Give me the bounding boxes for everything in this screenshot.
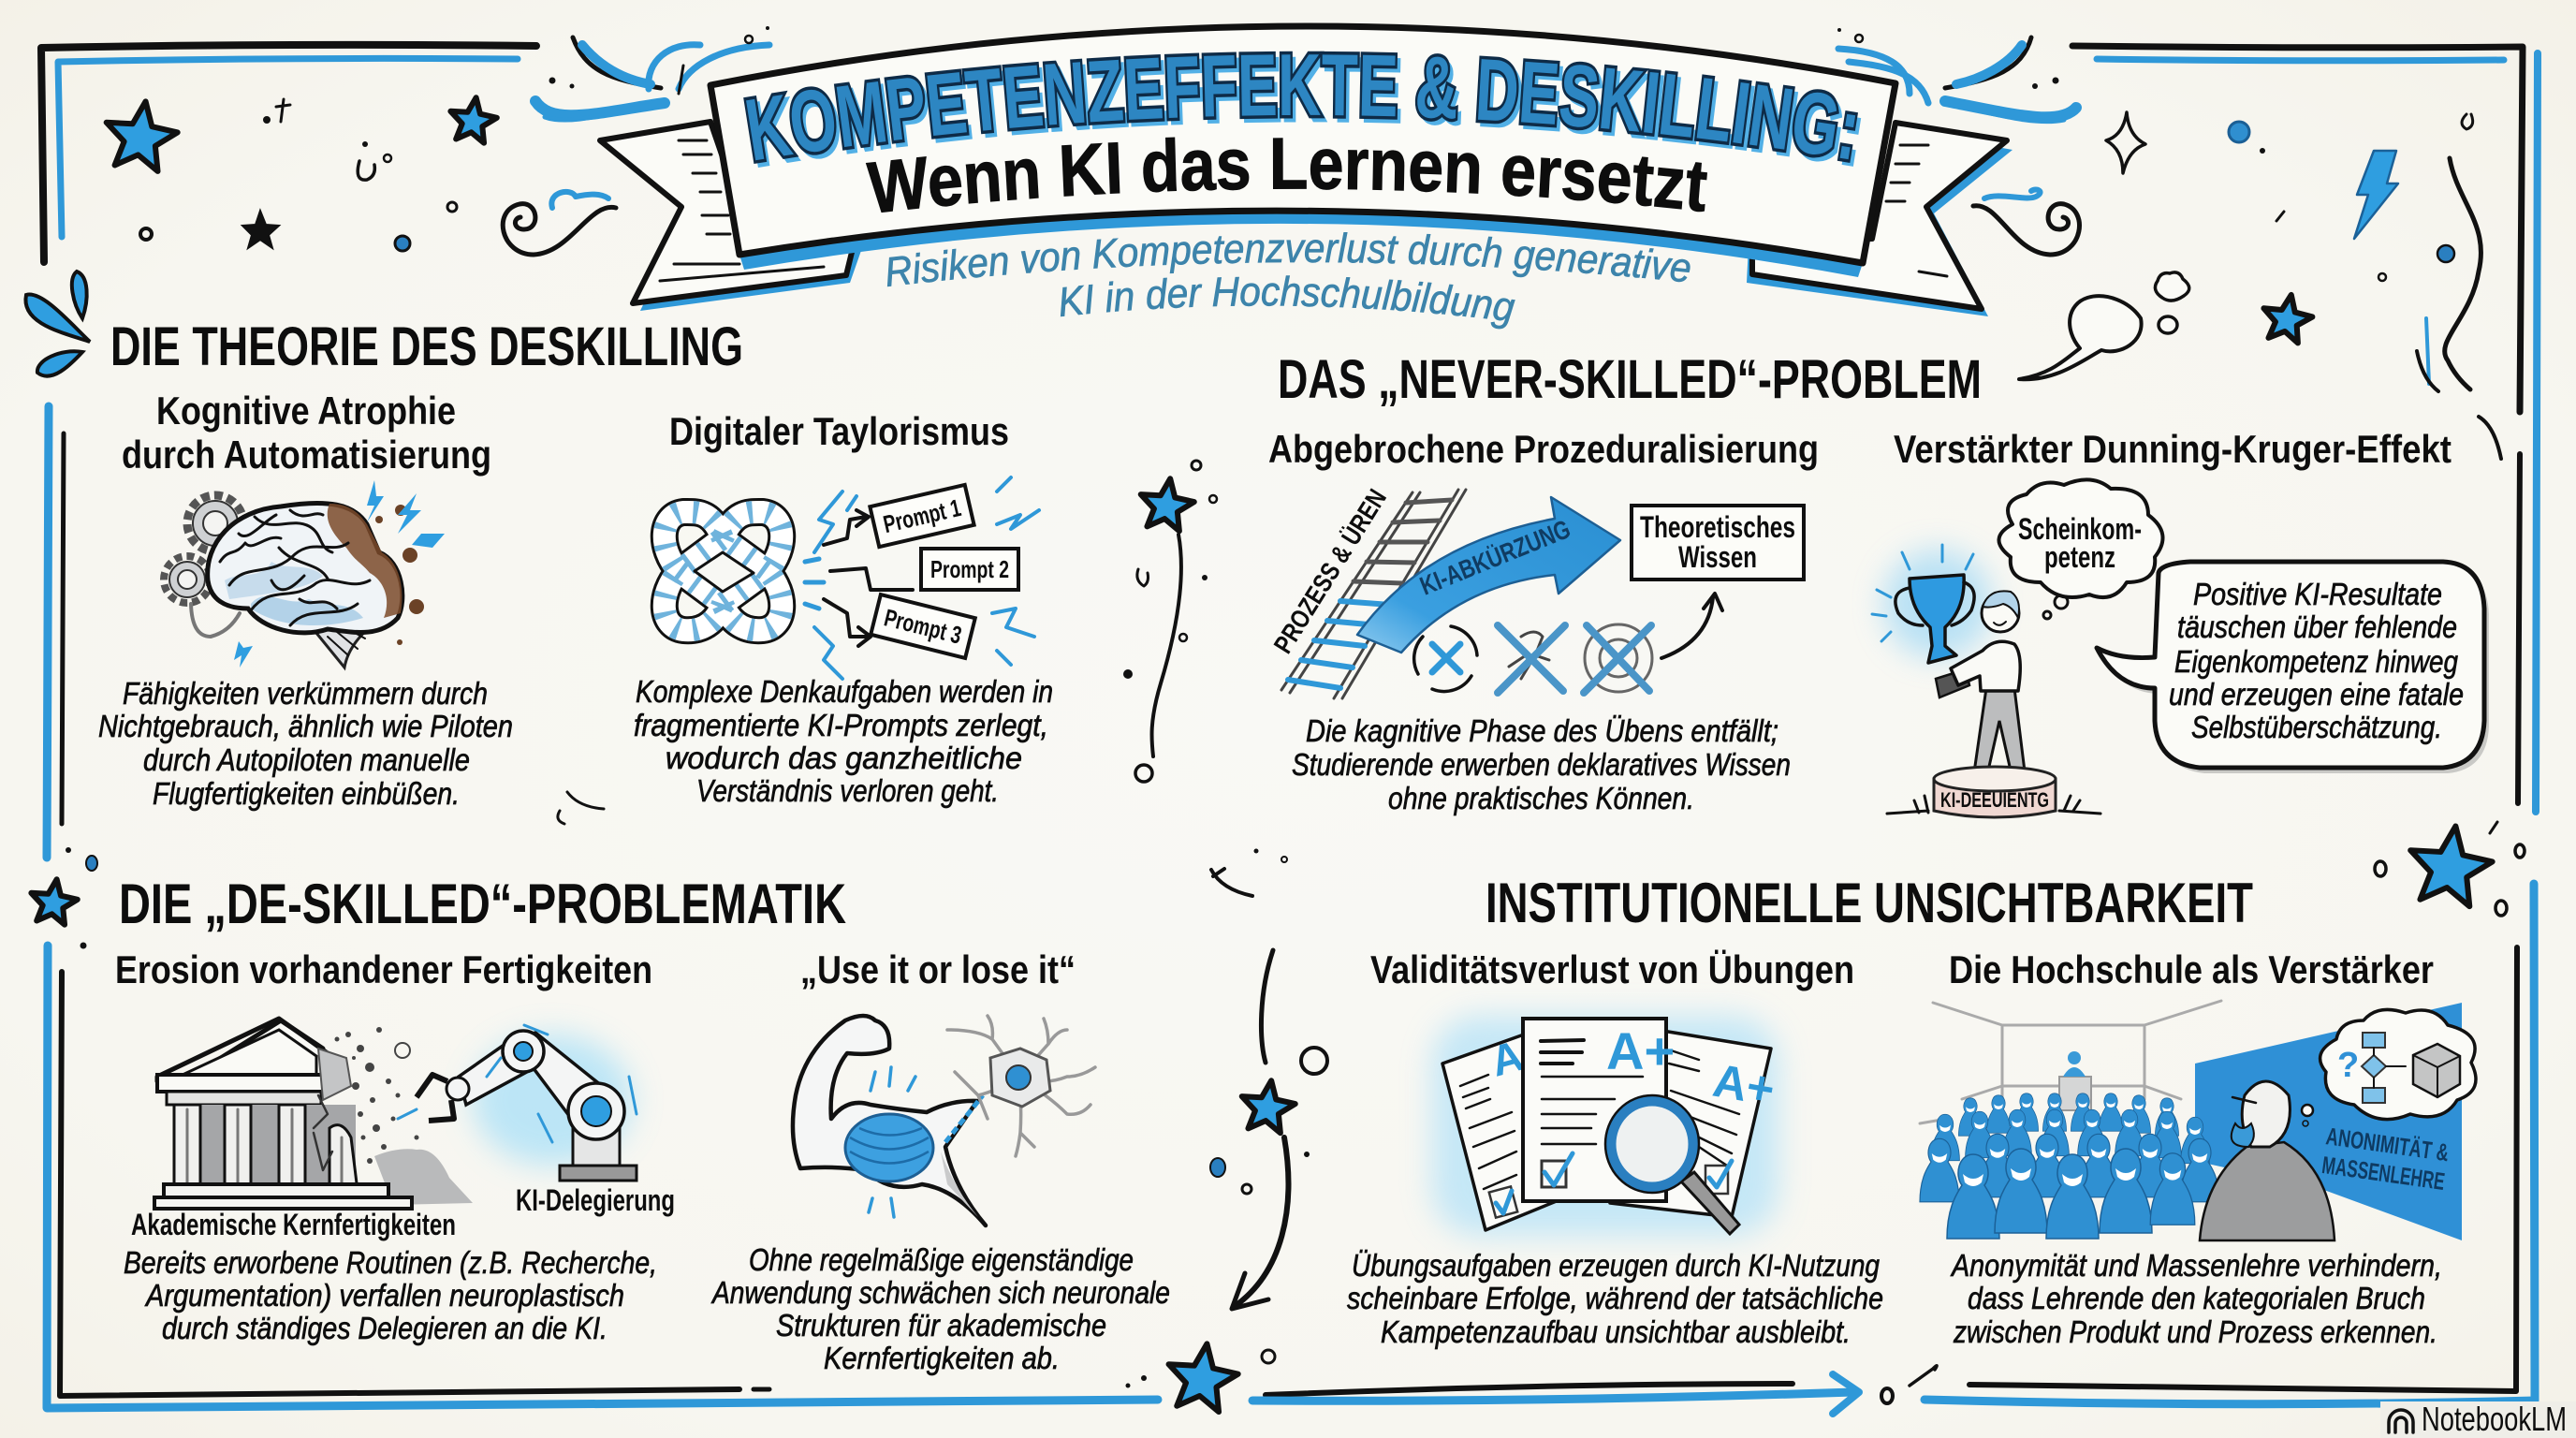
text: amplifier description: Anonymität und Massenlehre verhindern, xyxy=(1950,1248,2442,1283)
text: cognitive atrophy description: Fähigkeiten verkümmern durch xyxy=(123,676,488,711)
text: amplifier description: zwischen Produkt und Prozess erkennen. xyxy=(1953,1314,2437,1349)
icon: bottom centre star xyxy=(1125,1339,1275,1414)
paper right: A+ xyxy=(1709,1054,1778,1116)
text: validity description: Übungsaufgaben erzeugen durch KI-Nutzung xyxy=(1352,1248,1881,1283)
text: use it or lose it description: Strukturen für akademische xyxy=(776,1308,1106,1343)
section heading: institutional invisibility: INSTITUTIONELLE UNSICHTBARKEIT xyxy=(1486,872,2253,934)
box: Prompt 1: Prompt 1 xyxy=(881,493,963,538)
illustration: crumbling temple xyxy=(154,1019,473,1209)
text: proceduralization description xyxy=(1292,713,1791,815)
decoration: lower right star and rings xyxy=(1881,820,2525,1403)
paper centre xyxy=(1523,1019,1675,1201)
icon: prompt fragments with arrows xyxy=(805,477,1039,679)
box: theoretical knowledge: Wissen xyxy=(1678,540,1757,574)
thought cloud with process diagram: ? xyxy=(2337,1046,2359,1085)
text: digital taylorism description: fragmentierte KI-Prompts zerlegt, xyxy=(634,708,1048,742)
illustration: flexed arm and neuron xyxy=(793,1016,1095,1225)
person xyxy=(1951,591,2026,779)
callout: speech bubble: Selbstüberschätzung. xyxy=(2191,710,2442,744)
text: digital taylorism description: Komplexe Denkaufgaben werden in xyxy=(636,674,1053,709)
text: erosion description xyxy=(124,1245,657,1345)
paper centre: A+ xyxy=(1606,1021,1675,1080)
icon: left splash drops xyxy=(25,271,90,376)
banner: right tail xyxy=(1747,123,2012,316)
illustration: person with trophy on pedestal xyxy=(1872,479,2163,817)
paper left xyxy=(1442,1031,1563,1230)
trophy xyxy=(1895,575,1974,697)
decoration: top right sparkle, bolt, cloud and star xyxy=(2019,112,2501,459)
icon: rope knot xyxy=(665,512,782,630)
title banner xyxy=(597,22,2012,316)
text: validity description: scheinbare Erfolge, während der tatsächliche xyxy=(1347,1281,1883,1315)
magnifying glass xyxy=(1605,1095,1739,1234)
title line 2: Wenn KI das Lernen ersetzt xyxy=(865,137,1707,213)
label: process and practice: PROZESS & ÜREN xyxy=(1268,484,1392,658)
subheading: use it or lose it: „Use it or lose it“ xyxy=(800,947,1076,991)
text: cognitive atrophy description: durch Autopiloten manuelle xyxy=(143,742,470,777)
text: use it or lose it description: Ohne regelmäßige eigenständige xyxy=(749,1242,1134,1277)
text: use it or lose it description xyxy=(710,1242,1170,1375)
banner: main ribbon xyxy=(710,26,1895,263)
label: AI delegation: KI-Delegierung xyxy=(516,1183,675,1217)
subtitle: Risiken von Kompetenzverlust durch generative xyxy=(887,232,1690,286)
label: AI shortcut: KI-ABKÜRZUNG xyxy=(1416,514,1574,601)
label: academic core skills: Akademische Kernfertigkeiten xyxy=(131,1208,456,1241)
frame: bottom left corner xyxy=(47,946,1158,1408)
text: proceduralization description: ohne praktisches Können. xyxy=(1388,781,1694,815)
cloud: apparent competence: petenz xyxy=(2044,540,2115,574)
callout: speech bubble: und erzeugen eine fatale xyxy=(2169,677,2464,712)
box: Prompt 3: Prompt 3 xyxy=(882,603,964,650)
decoration: left flourishes beside banner xyxy=(503,26,769,255)
text: cognitive atrophy description: Nichtgebrauch, ähnlich wie Piloten xyxy=(98,709,513,743)
section heading: never-skilled: DAS „NEVER-SKILLED“-PROBLEM xyxy=(1278,349,1982,410)
blue wall xyxy=(2195,1003,2462,1240)
arrow: bottom frame arrow xyxy=(1252,1374,1859,1414)
subtitle: KI in der Hochschulbildung xyxy=(1060,275,1515,330)
text: amplifier description: dass Lehrende den kategorialen Bruch xyxy=(1968,1281,2425,1315)
audience xyxy=(1920,1093,2219,1239)
paper right xyxy=(1610,1030,1778,1217)
banner: left tail xyxy=(600,122,863,311)
icon: ladder with shortcut arrow xyxy=(1268,484,1804,698)
banner: shadow xyxy=(739,211,1863,277)
text: validity description xyxy=(1347,1248,1883,1349)
decoration: top left stars and dots xyxy=(101,95,499,251)
box: Prompt 1 xyxy=(870,485,974,547)
text: amplifier description xyxy=(1950,1248,2442,1349)
icon: eroding brain with gears xyxy=(164,480,445,668)
pedestal xyxy=(1887,767,2100,817)
text: digital taylorism description: wodurch das ganzheitliche xyxy=(666,741,1022,775)
callout: speech bubble: täuschen über fehlende xyxy=(2177,609,2457,644)
subheading: loss of validity: Validitätsverlust von Übungen xyxy=(1370,947,1854,991)
subheading: digital taylorism: Digitaler Taylorismus xyxy=(669,409,1009,453)
subheading: cognitive atrophy: Kognitive Atrophie xyxy=(156,389,456,433)
subheading: cognitive atrophy xyxy=(122,389,491,477)
text: digital taylorism description: Verständnis verloren geht. xyxy=(696,773,999,808)
box: Prompt 3 xyxy=(871,594,975,658)
illustration: lecture hall xyxy=(1920,1001,2476,1240)
arrow: AI shortcut xyxy=(1357,497,1620,653)
label: anonymity and mass teaching: ANONIMITÄT & xyxy=(2324,1122,2451,1167)
arrow: centre column curve with star xyxy=(1210,950,1327,1309)
box: theoretical knowledge xyxy=(1632,506,1804,580)
frame: top right corner xyxy=(2072,46,2538,812)
decoration: centre column star and line xyxy=(558,461,1287,896)
icons: practice cycle and crossed-out steps xyxy=(1414,594,1722,693)
pedestal: KI-DEEUIENTG xyxy=(1940,788,2049,812)
frame: bottom right corner xyxy=(1925,884,2535,1404)
text: erosion description: durch ständiges Delegieren an die KI. xyxy=(162,1311,607,1345)
subtitle xyxy=(887,232,1690,330)
section heading: theory of deskilling: DIE THEORIE DES DESKILLING xyxy=(110,316,743,377)
lecture room lines and podium xyxy=(1920,1001,2221,1123)
text: cognitive atrophy description: Flugfertigkeiten einbüßen. xyxy=(153,776,460,811)
subheading: aborted proceduralization: Abgebrochene Prozeduralisierung xyxy=(1268,427,1819,471)
text: digital taylorism description xyxy=(634,674,1053,808)
title line 1 shadow: KOMPETENZEFFEKTE & DESKILLING: xyxy=(757,56,1861,168)
text: use it or lose it description: Anwendung schwächen sich neuronale xyxy=(710,1275,1170,1310)
subheading: dunning-kruger: Verstärkter Dunning-Kruger-Effekt xyxy=(1894,427,2452,471)
callout: speech bubble: Positive KI-Resultate xyxy=(2193,577,2442,611)
title line 1: KOMPETENZEFFEKTE & DESKILLING: xyxy=(743,51,1858,164)
cloud: apparent competence: Scheinkom- xyxy=(2018,512,2142,546)
subheading: university as amplifier: Die Hochschule als Verstärker xyxy=(1949,947,2434,991)
text: erosion description: Argumentation) verfallen neuroplastisch xyxy=(144,1278,624,1313)
box: theoretical knowledge: Theoretisches xyxy=(1640,510,1795,544)
cloud: apparent competence xyxy=(1998,479,2163,597)
text: erosion description: Bereits erworbene Routinen (z.B. Recherche, xyxy=(124,1245,657,1280)
illustration: robot arm xyxy=(398,1025,637,1181)
label: anonymity and mass teaching xyxy=(2320,1122,2451,1196)
thought dots xyxy=(2043,595,2068,619)
text: proceduralization description: Die kagnitive Phase des Übens entfällt; xyxy=(1306,713,1778,748)
lecturer from behind xyxy=(2200,1081,2334,1240)
callout: speech bubble xyxy=(2097,562,2489,773)
paper left: A xyxy=(1486,1031,1529,1086)
callout: speech bubble: Eigenkompetenz hinweg xyxy=(2174,644,2459,679)
label: anonymity and mass teaching: MASSENLEHRE xyxy=(2320,1151,2447,1196)
frame: top left corner xyxy=(41,45,536,262)
box: Prompt 2 xyxy=(921,549,1018,590)
text: proceduralization description: Studierende erwerben deklaratives Wissen xyxy=(1292,747,1791,782)
decoration: lower left star and dots xyxy=(27,847,97,949)
illustration: graded papers under magnifier xyxy=(1432,1016,1778,1236)
text: cognitive atrophy description xyxy=(98,676,513,811)
decoration: right flourishes beside banner xyxy=(1837,28,2079,255)
subheading: erosion: Erosion vorhandener Fertigkeiten xyxy=(115,947,652,991)
text: use it or lose it description: Kernfertigkeiten ab. xyxy=(824,1341,1060,1375)
frame: left middle xyxy=(47,406,64,858)
thought cloud with process diagram xyxy=(2302,1009,2476,1126)
subheading: cognitive atrophy: durch Automatisierung xyxy=(122,433,491,477)
section heading: de-skilled: DIE „DE-SKILLED“-PROBLEMATIK xyxy=(119,873,846,935)
box: Prompt 2: Prompt 2 xyxy=(930,555,1009,583)
text: validity description: Kampetenzaufbau unsichtbar ausbleibt. xyxy=(1381,1314,1851,1349)
